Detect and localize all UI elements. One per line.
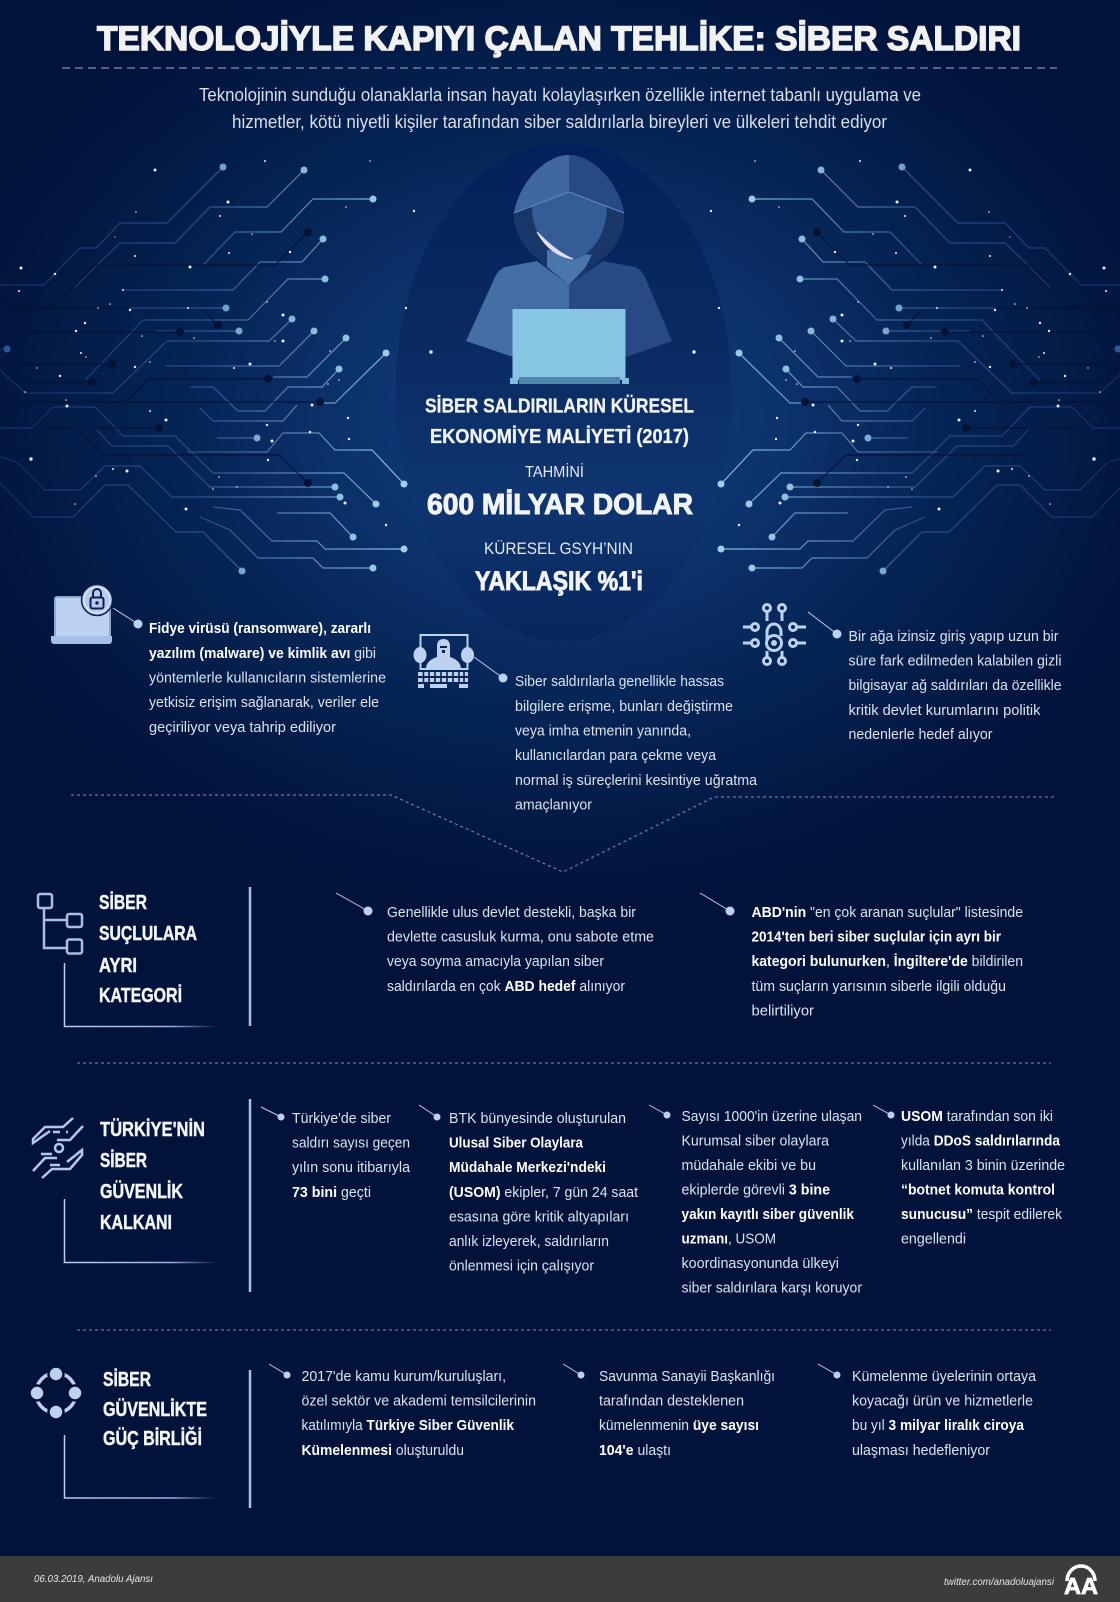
text: turnover target <box>852 1368 1037 1459</box>
text: response teams: uzmanı, USOM <box>682 1230 776 1248</box>
text: cluster founded <box>302 1368 536 1459</box>
text: state backed attacks <box>387 904 654 995</box>
text block: attack goals: veya imha etmenin yanında, <box>515 722 691 740</box>
text: USOM teams: (USOM) ekipler, 7 gün 24 saat <box>449 1184 639 1201</box>
text: response teams: ekiplerde görevli 3 bine <box>682 1182 830 1198</box>
pointer <box>336 893 372 916</box>
pointer <box>700 893 734 916</box>
text: most wanted list: ABD'nin "en çok aranan suçlular" listesinde <box>752 904 1023 921</box>
central cost statistic: SİBER SALDIRILARIN KÜRESEL <box>425 394 694 418</box>
footer date: 06.03.2019, Anadolu Ajansı <box>34 1574 153 1585</box>
pointer <box>563 1364 584 1378</box>
central cost statistic: EKONOMİYE MALİYETİ (2017) <box>430 425 689 448</box>
pointer <box>873 1105 894 1118</box>
hacker figure <box>466 155 672 384</box>
text: attack count: Türkiye'de siber <box>292 1110 391 1127</box>
footer twitter handle: twitter.com/anadoluajansi <box>944 1576 1055 1588</box>
central cost statistic: KÜRESEL GSYH’NIN <box>484 539 633 558</box>
text block: attack goals <box>515 673 758 814</box>
text: most wanted list: kategori bulunurken, İngiltere'de bildirilen <box>752 953 1023 970</box>
title: TEKNOLOJİYLE KAPIYI ÇALAN TEHLİKE: SİBER SALDIRI <box>97 20 1021 58</box>
central cost statistic: YAKLAŞIK %1'i <box>475 566 643 596</box>
text: state backed attacks: Genellikle ulus devlet destekli, başka bir <box>387 904 636 921</box>
text: response teams: yakın kayıtlı siber güvenlik <box>682 1206 855 1223</box>
text: botnet servers: yılda DDoS saldırılarında <box>901 1132 1061 1150</box>
hacker: neck <box>547 250 592 285</box>
text: USOM teams <box>449 1110 639 1274</box>
heading: KATEGORİ <box>99 984 182 1007</box>
text: cluster founded: katılımıyla Türkiye Siber Güvenlik <box>302 1417 515 1434</box>
pointer <box>419 1105 440 1120</box>
text block: attack goals: kullanıcılardan para çekme veya <box>515 747 717 764</box>
text block: network infiltration: süre fark edilmeden kalabilen gizli <box>848 652 1062 670</box>
icon: protecting hands <box>33 1118 83 1178</box>
callout pointer: ransomware <box>113 608 142 628</box>
icon: hacker on screen <box>414 635 474 688</box>
text: USOM teams: anlık izleyerek, saldırıların <box>449 1233 609 1250</box>
text block: ransomware: yöntemlerle kullanıcıların sistemlerine <box>149 670 386 686</box>
section: cybercriminal category <box>38 887 1023 1026</box>
text block: attack goals: Siber saldırılarla genellikle hassas <box>515 673 724 690</box>
text: turnover target: ulaşması hedefleniyor <box>852 1442 990 1459</box>
callout pointer: network infiltration <box>808 612 842 638</box>
text block: attack goals: amaçlanıyor <box>515 796 592 814</box>
hacker: laptop base <box>510 378 629 384</box>
text: member count: kümelenmenin üye sayısı <box>599 1417 759 1434</box>
hood backdrop ellipse <box>396 143 732 641</box>
text block: ransomware: yazılım (malware) ve kimlik avı gibi <box>149 645 376 662</box>
text: most wanted list: 2014'ten beri siber suçlular için ayrı bir <box>752 928 1001 946</box>
text: most wanted list <box>752 904 1023 1020</box>
text: turnover target: bu yıl 3 milyar liralık ciroya <box>852 1417 1025 1434</box>
heading: SİBER <box>100 1149 147 1172</box>
text: botnet servers: “botnet komuta kontrol <box>901 1182 1055 1198</box>
text: member count: tarafından desteklenen <box>599 1392 744 1410</box>
text: botnet servers: sunucusu” tespit edilerek <box>901 1206 1062 1223</box>
text: state backed attacks: devlette casusluk kurma, onu sabote etme <box>387 928 654 946</box>
text block: ransomware: yetkisiz erişim sağlanarak, veriler ele <box>149 694 379 711</box>
text: turnover target: koyacağı ürün ve hizmetlerle <box>852 1392 1033 1410</box>
icon: laptop with lock <box>51 584 112 644</box>
central cost statistic: 600 MİLYAR DOLAR <box>427 489 693 521</box>
text block: ransomware: Fidye virüsü (ransomware), zararlı <box>149 620 371 637</box>
icon: cluster circle <box>30 1366 82 1420</box>
section: power union in cyber security <box>30 1364 1037 1508</box>
text block: network infiltration: Bir ağa izinsiz giriş yapıp uzun bir <box>848 628 1058 645</box>
pointer <box>261 1107 284 1120</box>
heading: GÜÇ BİRLİĞİ <box>103 1426 202 1450</box>
text: attack count: saldırı sayısı geçen <box>292 1134 410 1152</box>
heading <box>103 1368 207 1450</box>
pointer <box>269 1364 290 1378</box>
icon: hierarchy tree <box>38 894 82 954</box>
heading: SUÇLULARA <box>99 923 197 945</box>
text block: ransomware: geçiriliyor veya tahrip ediliyor <box>149 719 336 736</box>
heading: SİBER <box>103 1368 151 1391</box>
text: response teams: Sayısı 1000'in üzerine ulaşan <box>682 1108 862 1125</box>
text: turnover target: Kümelenme üyelerinin ortaya <box>852 1368 1037 1385</box>
hacker: under hood <box>514 192 624 287</box>
text: USOM teams: önlenmesi için çalışıyor <box>449 1258 594 1274</box>
text: response teams: koordinasyonunda ülkeyi <box>682 1255 839 1272</box>
text block: ransomware <box>149 620 386 736</box>
text block: network infiltration <box>848 628 1062 743</box>
text: response teams: Kurumsal siber olaylara <box>682 1132 830 1150</box>
heading: GÜVENLİKTE <box>103 1398 207 1421</box>
text: cluster founded: Kümelenmesi oluşturuldu <box>302 1442 464 1459</box>
circuit traces: right (mirror) <box>692 160 1120 574</box>
logo: AA: AA <box>1064 1573 1098 1599</box>
footer bar <box>0 1556 1120 1602</box>
hacker: face <box>532 192 607 260</box>
text: response teams: müdahale ekibi ve bu <box>682 1157 816 1174</box>
pointer <box>818 1364 840 1378</box>
intro text: Teknolojinin sunduğu olanaklarla insan hayatı kolaylaşırken özellikle internet tabanlı uygulama ve <box>199 85 921 105</box>
text: cluster founded: özel sektör ve akademi temsilcilerinin <box>302 1392 536 1410</box>
text: response teams: siber saldırılara karşı koruyor <box>682 1280 862 1296</box>
central cost statistic: TAHMİNİ <box>525 462 584 481</box>
text: botnet servers: USOM tarafından son iki <box>901 1108 1053 1125</box>
text: response teams <box>682 1108 862 1296</box>
heading: KALKANI <box>100 1212 172 1234</box>
hacker: laptop screen <box>512 309 626 378</box>
text block: network infiltration: bilgisayar ağ saldırıları da özellikle <box>848 677 1062 694</box>
hacker: left shoulder <box>466 261 569 357</box>
text: state backed attacks: saldırılarda en çok ABD hedef alınıyor <box>387 978 625 995</box>
heading: TÜRKİYE'NİN <box>100 1118 205 1141</box>
hacker: grin <box>537 232 573 259</box>
text: member count: 104'e ulaştı <box>599 1442 671 1459</box>
intro text <box>199 85 921 132</box>
section: Turkey's cyber shield <box>33 1099 1065 1296</box>
text: state backed attacks: veya soyma amacıyla yapılan siber <box>387 953 604 970</box>
text: botnet servers <box>901 1108 1065 1248</box>
text: member count: Savunma Sanayii Başkanlığı <box>599 1368 775 1385</box>
heading <box>100 1118 205 1234</box>
text: USOM teams: esasına göre kritik altyapıları <box>449 1208 629 1226</box>
heading: AYRI <box>99 955 137 977</box>
text: attack count <box>292 1110 411 1201</box>
heading: GÜVENLİK <box>100 1180 183 1203</box>
text: USOM teams: BTK bünyesinde oluşturulan <box>449 1110 626 1127</box>
text block: attack goals: normal iş süreçlerini kesintiye uğratma <box>515 772 758 789</box>
icon: network lock <box>743 604 806 664</box>
heading <box>99 891 197 1007</box>
text: cluster founded: 2017'de kamu kurum/kuruluşları, <box>302 1368 506 1385</box>
text: USOM teams: Müdahale Merkezi'ndeki <box>449 1159 606 1176</box>
text block: network infiltration: nedenlerle hedef alıyor <box>848 726 993 743</box>
text: botnet servers: kullanılan 3 binin üzerinde <box>901 1157 1065 1174</box>
text: botnet servers: engellendi <box>901 1230 966 1248</box>
text: member count <box>599 1368 775 1459</box>
text: USOM teams: Ulusal Siber Olaylara <box>449 1134 584 1152</box>
callout pointer: attack goals <box>474 657 508 682</box>
intro text: hizmetler, kötü niyetli kişiler tarafından siber saldırılarla bireyleri ve ülkeleri tehdit ediyor <box>232 112 887 132</box>
text: most wanted list: tüm suçların yarısının siberle ilgili olduğu <box>752 978 1006 995</box>
circuit traces: left <box>0 160 433 574</box>
text: attack count: 73 bini geçti <box>292 1184 371 1201</box>
text: most wanted list: belirtiliyor <box>752 1002 814 1020</box>
heading: SİBER <box>99 891 147 914</box>
hacker: right shoulder <box>569 261 672 357</box>
central cost statistic <box>425 394 694 596</box>
hacker: hood right <box>569 155 624 213</box>
text block: network infiltration: kritik devlet kurumlarını politik <box>848 702 1041 719</box>
text: attack count: yılın sonu itibarıyla <box>292 1159 411 1176</box>
hacker: hood left <box>514 155 569 213</box>
text block: attack goals: bilgilere erişme, bunları değiştirme <box>515 698 733 715</box>
pointer <box>649 1105 670 1118</box>
